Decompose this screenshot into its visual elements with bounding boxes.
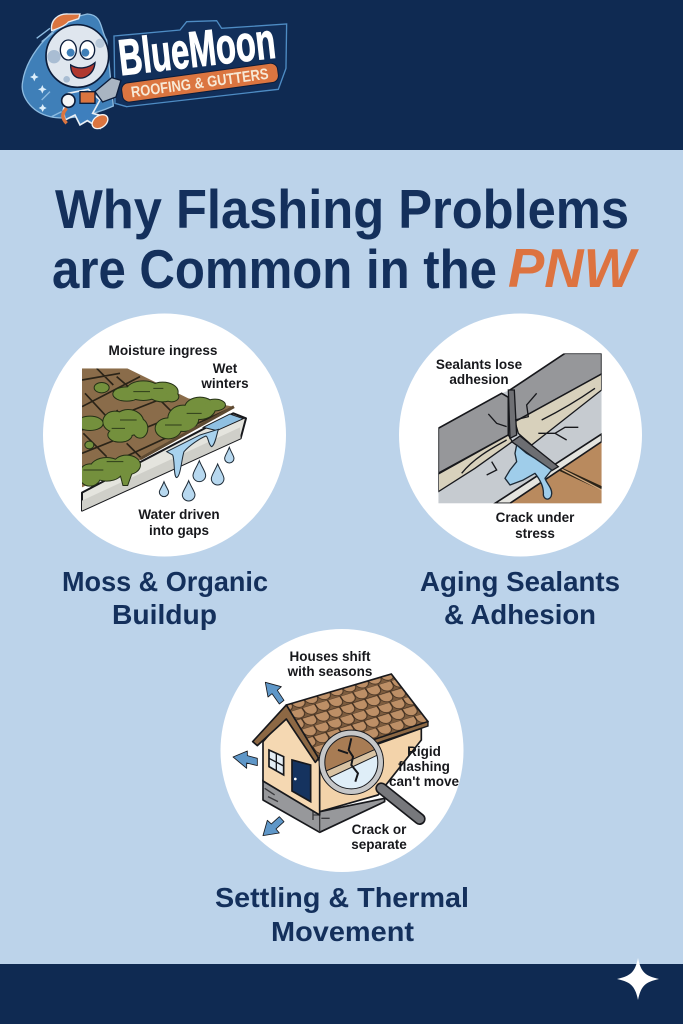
label: moisture ingress: Moisture ingress	[108, 343, 218, 358]
label: rigid flashing can't move: Rigid	[407, 744, 441, 759]
magnifying glass	[321, 733, 420, 819]
gutter	[82, 413, 246, 511]
caption: settling and thermal movement: Movement	[271, 916, 414, 947]
label: water driven into gaps: Water driven	[138, 507, 220, 522]
label: crack or separate: Crack or	[352, 822, 407, 837]
leaking water	[505, 445, 552, 499]
label: crack under stress: Crack under	[496, 510, 575, 525]
caption: moss and organic buildup	[62, 566, 268, 630]
header band	[0, 0, 683, 150]
mascot moon head	[46, 25, 109, 87]
banner text: ROOFING & GUTTERS	[130, 66, 270, 101]
cracked sealant bands	[438, 435, 512, 492]
logo: BlueMoon Roofing & Gutters	[22, 12, 287, 132]
door	[292, 760, 311, 802]
side wall	[320, 728, 421, 812]
front wall	[263, 715, 320, 815]
wall panels	[510, 353, 602, 422]
shingled roof	[286, 674, 428, 758]
title accent PNW: PNW	[508, 237, 639, 299]
movement arrows	[233, 682, 284, 836]
label: crack under stress: stress	[515, 526, 555, 541]
illustration: cracked flashing joint	[438, 353, 602, 503]
caption: settling and thermal movement: Settling & Thermal	[215, 882, 469, 913]
panel: aging sealants and adhesion	[399, 314, 642, 556]
label: crack or separate: separate	[351, 837, 407, 852]
crack lines	[462, 388, 595, 475]
caption: moss and organic buildup: Moss & Organic	[62, 566, 268, 597]
label: houses shift with seasons: with seasons	[287, 664, 372, 679]
caption: aging sealants and adhesion: Aging Sealants	[420, 566, 620, 597]
panel: settling and thermal movement	[220, 629, 464, 872]
caption: settling and thermal movement	[215, 882, 469, 947]
mascot cap	[51, 14, 80, 31]
title: Why Flashing Problems	[55, 178, 629, 240]
panel: moss and organic buildup	[43, 314, 286, 556]
logo swoosh	[22, 14, 113, 118]
label: water driven into gaps: into gaps	[149, 523, 209, 538]
logo sparkles	[30, 73, 47, 112]
label: sealants lose adhesion: Sealants lose	[436, 357, 523, 372]
moss clumps	[77, 381, 225, 486]
water drips	[167, 429, 218, 478]
icon: four-point sparkle	[617, 958, 659, 1000]
label: wet winters: Wet	[213, 361, 238, 376]
roof shingles	[82, 367, 235, 490]
title	[52, 178, 639, 300]
caption: aging sealants and adhesion: & Adhesion	[444, 599, 596, 630]
roof edge	[140, 407, 234, 459]
caption: aging sealants and adhesion	[420, 566, 620, 630]
window	[269, 750, 284, 775]
brown deck	[510, 442, 602, 503]
mascot body	[62, 78, 121, 132]
label: rigid flashing can't move: flashing	[398, 759, 450, 774]
illustration: mossy roof and gutter	[77, 367, 246, 511]
footer band	[0, 958, 683, 1024]
label: rigid flashing can't move: can't move	[389, 774, 459, 789]
label: sealants lose adhesion: adhesion	[449, 372, 509, 387]
logo speed streaks	[37, 28, 62, 117]
label: wet winters: winters	[200, 376, 249, 391]
label: houses shift with seasons: Houses shift	[289, 649, 371, 664]
caption: moss and organic buildup: Buildup	[112, 599, 217, 630]
illustration: house with magnifier	[233, 674, 428, 836]
title: are Common in the	[52, 238, 497, 300]
water drops	[159, 447, 234, 501]
logo text plate	[114, 21, 287, 107]
wordmark BlueMoon: BlueMoon	[115, 12, 278, 86]
foundation	[263, 780, 385, 832]
orange banner	[121, 62, 279, 103]
